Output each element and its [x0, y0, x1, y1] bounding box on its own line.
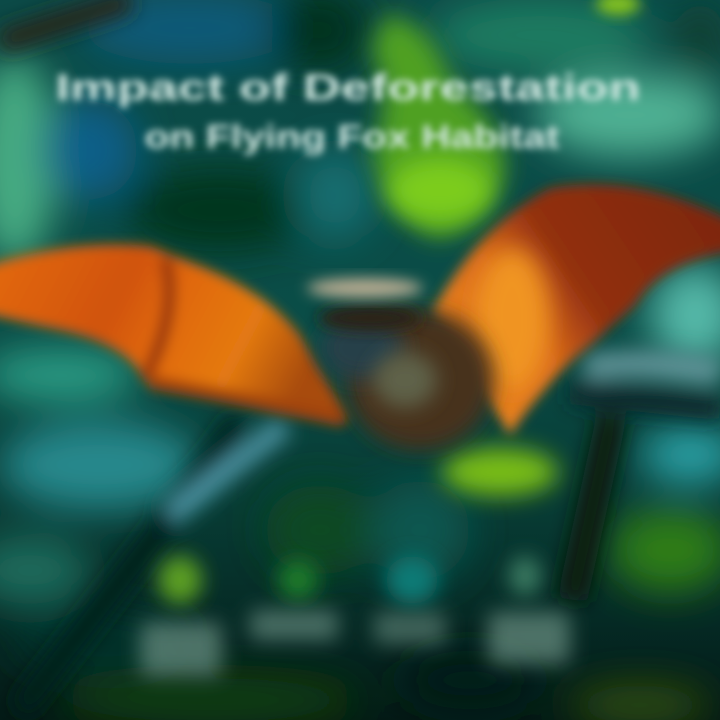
bat: right wing — [432, 184, 720, 435]
icon: green marker 1 — [158, 556, 202, 604]
icon: green marker 2 — [278, 560, 318, 600]
bottom icons and captions — [158, 556, 541, 604]
bat: left wing — [0, 244, 350, 420]
icon: pale marker 4 — [509, 556, 541, 596]
bright green leaf — [370, 0, 640, 238]
caption block 4 — [488, 612, 570, 664]
title — [56, 67, 640, 155]
icon: teal marker 3 — [386, 556, 438, 604]
title: on Flying Fox Habitat — [144, 118, 560, 155]
bat: body and head — [307, 278, 494, 450]
caption block 3 — [374, 612, 446, 644]
caption block 2 — [250, 610, 338, 640]
green leaf, lower centre — [442, 448, 558, 496]
caption block 1 — [140, 622, 222, 676]
title: Impact of Deforestation — [56, 67, 640, 108]
